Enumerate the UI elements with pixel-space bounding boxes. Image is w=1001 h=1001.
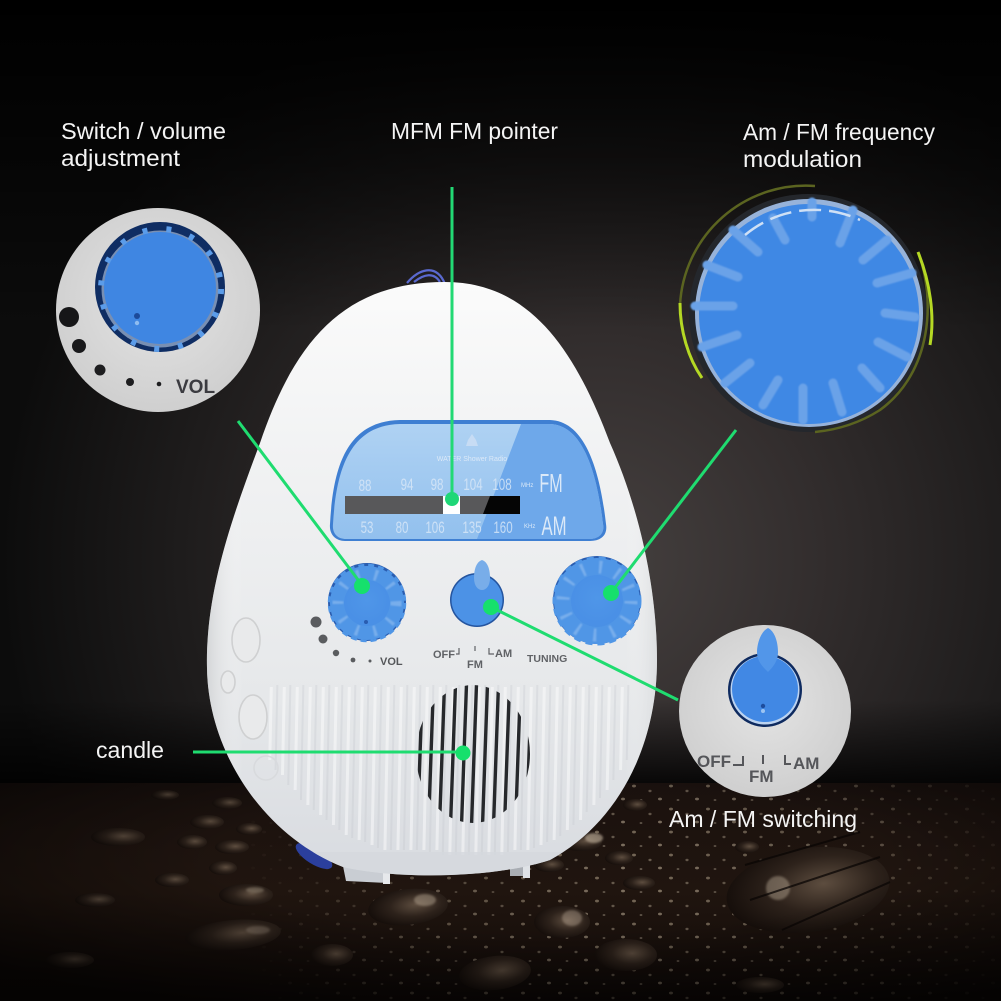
- LCD display: AM: [541, 511, 567, 541]
- band switch knob: [450, 560, 504, 627]
- LCD scale text: 98: [431, 476, 443, 495]
- label: switching: Am / FM switching: [669, 806, 857, 832]
- speaker slots: [418, 685, 530, 823]
- label: frequency: Am / FM frequency: [743, 119, 935, 145]
- leader line: band switch: [483, 599, 678, 700]
- LCD scale text: 88: [359, 477, 371, 496]
- blue base shadow: [292, 838, 336, 874]
- LCD display: KHz: [524, 524, 535, 530]
- band switch labels: TUNING: [527, 653, 567, 665]
- leader line: pointer: [445, 187, 459, 506]
- label: volume line 2: adjustment: [61, 145, 181, 171]
- speaker grille ridges: [268, 685, 629, 876]
- inset: band switch detail: [679, 625, 851, 797]
- LCD scale text: 94: [401, 476, 413, 495]
- LCD display: [330, 420, 606, 541]
- band switch labels: [433, 646, 567, 671]
- inset: band switch detail: FM: [749, 767, 774, 786]
- LCD scale text: 160: [493, 519, 513, 538]
- label: pointer: MFM FM pointer: [391, 118, 558, 144]
- egg shell: [207, 282, 657, 875]
- volume dots and label: [310, 616, 403, 668]
- water drops on shell: [221, 618, 278, 780]
- label: volume: Switch / volume: [61, 118, 226, 144]
- LCD scale text: [359, 476, 513, 538]
- volume knob: [328, 563, 406, 641]
- band switch labels: OFF: [433, 649, 455, 661]
- band switch labels: AM: [495, 648, 512, 660]
- LCD scale text: 108: [492, 476, 512, 495]
- LCD scale text: 53: [361, 519, 373, 538]
- label: candle: candle: [96, 737, 164, 763]
- volume dots and label: VOL: [380, 656, 403, 668]
- inset: band switch detail: AM: [793, 754, 819, 773]
- leader line: tuning: [603, 430, 736, 601]
- band switch labels: FM: [467, 659, 483, 671]
- LCD scale text: 106: [425, 519, 445, 538]
- LCD display: WATER Shower Radio: [437, 456, 507, 463]
- inset: volume knob detail: [56, 208, 260, 412]
- LCD display: FM: [539, 468, 563, 498]
- radio body: [207, 270, 657, 884]
- LCD scale text: 135: [462, 519, 482, 538]
- inset: tuning knob detail: [680, 186, 932, 432]
- inset: volume knob detail: VOL: [176, 377, 215, 398]
- LCD display: MHz: [521, 483, 533, 489]
- tuning knob: [553, 556, 641, 644]
- feet: [343, 866, 388, 883]
- leader line: speaker: [193, 746, 470, 760]
- leader line: volume: [238, 421, 370, 594]
- LCD scale text: 80: [396, 519, 408, 538]
- floor with water droplets: [0, 783, 1001, 1001]
- blue strap: [407, 270, 445, 284]
- inset: band switch detail: OFF: [697, 752, 731, 771]
- LCD scale text: 104: [463, 476, 483, 495]
- label: frequency line 2: modulation: [743, 146, 862, 172]
